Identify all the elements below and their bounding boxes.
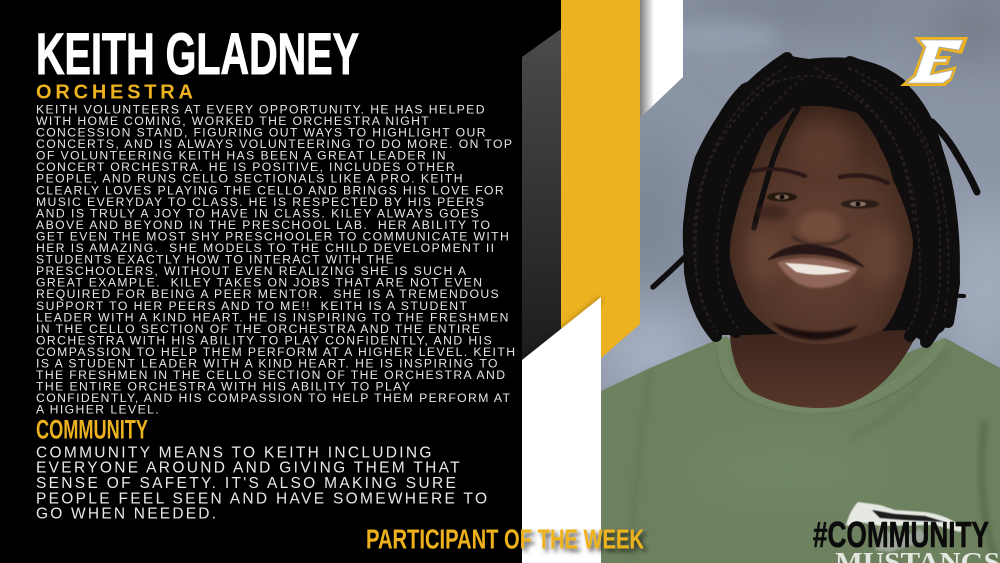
- mouth: lips and teeth: [777, 258, 858, 288]
- white top-right slanted panel: [640, 0, 683, 118]
- text block: nomination description: ORCHESTRA WITH HIS ABILITY TO PLAY CONFIDENTLY, AND HIS: [36, 333, 492, 347]
- text block: nomination description: MUSIC EVERYDAY TO CLASS. HE IS RESPECTED BY HIS PEERS: [36, 195, 484, 209]
- text block: nomination description: COMPASSION TO HELP THEM PERFORM AT A HIGHER LEVEL. KEITH: [36, 345, 515, 359]
- title: student name: KEITH GLADNEY: [36, 22, 359, 87]
- text block: nomination description: PEOPLE, AND RUNS CELLO SECTIONALS LIKE A PRO. KEITH: [36, 172, 463, 186]
- neck: [730, 330, 914, 408]
- text block: community statement: [36, 444, 487, 523]
- eyebrows: [753, 169, 888, 183]
- text block: nomination description: WITH HOME COMING, WORKED THE ORCHESTRA NIGHT: [36, 114, 429, 128]
- white lower slanted panel: [522, 297, 601, 563]
- hair: forehead loc: [754, 108, 798, 228]
- text block: nomination description: THE ENTIRE ORCHESTRA WITH HIS ABILITY TO PLAY: [36, 380, 410, 394]
- mustache: [768, 245, 864, 267]
- eyes: [767, 192, 879, 208]
- text block: nomination description: GET EVEN THE MOST SHY PRESCHOOLER TO COMMUNICATE WITH: [36, 230, 509, 244]
- nose: [792, 211, 850, 244]
- text block: nomination description: LEADER WITH A KIND HEART. HE IS INSPIRING TO THE FRESHMEN: [36, 310, 508, 324]
- text block: nomination description: CONCERT ORCHESTRA. HE IS POSITIVE, INCLUDES OTHER: [36, 160, 455, 174]
- text block: nomination description: HER IS AMAZING. SHE MODELS TO THE CHILD DEVELOPMENT II: [36, 241, 494, 255]
- emblem on shirt: mustang: [835, 502, 1000, 563]
- text block: nomination description: IS A STUDENT LEADER WITH A KIND HEART. HE IS INSPIRING TO: [36, 356, 498, 370]
- text block: nomination description: REQUIRED FOR BEING A PEER MENTOR. SHE IS A TREMENDOUS: [36, 287, 499, 301]
- hair: thick locs: [689, 58, 954, 342]
- photo backdrop: mottled gray: [601, 0, 1000, 391]
- hair: back mass: [684, 55, 960, 343]
- text block: community statement: COMMUNITY MEANS TO KEITH INCLUDING: [36, 444, 431, 461]
- heading: community: COMMUNITY: [36, 414, 148, 444]
- text block: nomination description: STUDENTS EXACTLY HOW TO INTERACT WITH THE: [36, 253, 394, 267]
- hair: loose strands: [653, 122, 977, 296]
- cheek highlights and eye shadow: [747, 120, 898, 285]
- text block: nomination description: SUPPORT TO HER PEERS AND TO ME!! KEITH IS A STUDENT: [36, 299, 468, 313]
- text block: community statement: SENSE OF SAFETY. IT'S ALSO MAKING SURE: [36, 475, 456, 492]
- photo: student portrait: [595, 0, 1000, 563]
- text block: nomination description: PRESCHOOLERS, WITHOUT EVEN REALIZING SHE IS SUCH A: [36, 264, 467, 278]
- gold vertical banner: [561, 0, 640, 358]
- text block: nomination description: THE FRESHMEN IN THE CELLO SECTION OF THE ORCHESTRA AND: [36, 368, 505, 382]
- hair: twist texture: [694, 66, 949, 336]
- shirt: [601, 336, 1000, 563]
- dark gray slanted band: [522, 29, 561, 372]
- text block: nomination description: CONCERTS, AND IS ALWAYS VOLUNTEERING TO DO MORE. ON TOP: [36, 137, 512, 151]
- footer label: participant of the week: PARTICIPANT OF THE WEEK: [366, 523, 644, 554]
- logo: E emblem: [900, 37, 968, 86]
- text block: nomination description: IN THE CELLO SECTION OF THE ORCHESTRA AND THE ENTIRE: [36, 322, 480, 336]
- subtitle: activity: ORCHESTRA: [36, 82, 193, 104]
- shadow of white shape on gold banner: [522, 297, 603, 368]
- text block: nomination description: AND IS TRULY A JOY TO HAVE IN CLASS. KILEY ALWAYS GOES: [36, 206, 479, 220]
- text block: community statement: GO WHEN NEEDED.: [36, 506, 216, 523]
- shadow of gold band on white panel: [640, 0, 654, 118]
- text block: nomination description: CONCESSION STAND, FIGURING OUT WAYS TO HIGHLIGHT OUR: [36, 126, 486, 140]
- text block: nomination description: [36, 102, 515, 417]
- text block: nomination description: A HIGHER LEVEL.: [36, 403, 159, 417]
- text block: community statement: EVERYONE AROUND AND GIVING THEM THAT: [36, 460, 460, 477]
- text block: community statement: PEOPLE FEEL SEEN AND HAVE SOMEWHERE TO: [36, 490, 487, 507]
- text block: nomination description: KEITH VOLUNTEERS AT EVERY OPPORTUNITY. HE HAS HELPED: [36, 102, 485, 116]
- text block: nomination description: ABOVE AND BEYOND IN THE PRESCHOOL LAB. HER ABILITY TO: [36, 218, 490, 232]
- text block: nomination description: CLEARLY LOVES PLAYING THE CELLO AND BRINGS HIS LOVE FOR: [36, 183, 504, 197]
- text block: nomination description: OF VOLUNTEERING KEITH HAS BEEN A GREAT LEADER IN: [36, 149, 446, 163]
- text block: nomination description: CONFIDENTLY, AND HIS COMPASSION TO HELP THEM PERFORM AT: [36, 391, 511, 405]
- goatee: [772, 322, 858, 340]
- face: [730, 106, 913, 344]
- text block: nomination description: GREAT EXAMPLE. KILEY TAKES ON JOBS THAT ARE NOT EVEN: [36, 276, 482, 290]
